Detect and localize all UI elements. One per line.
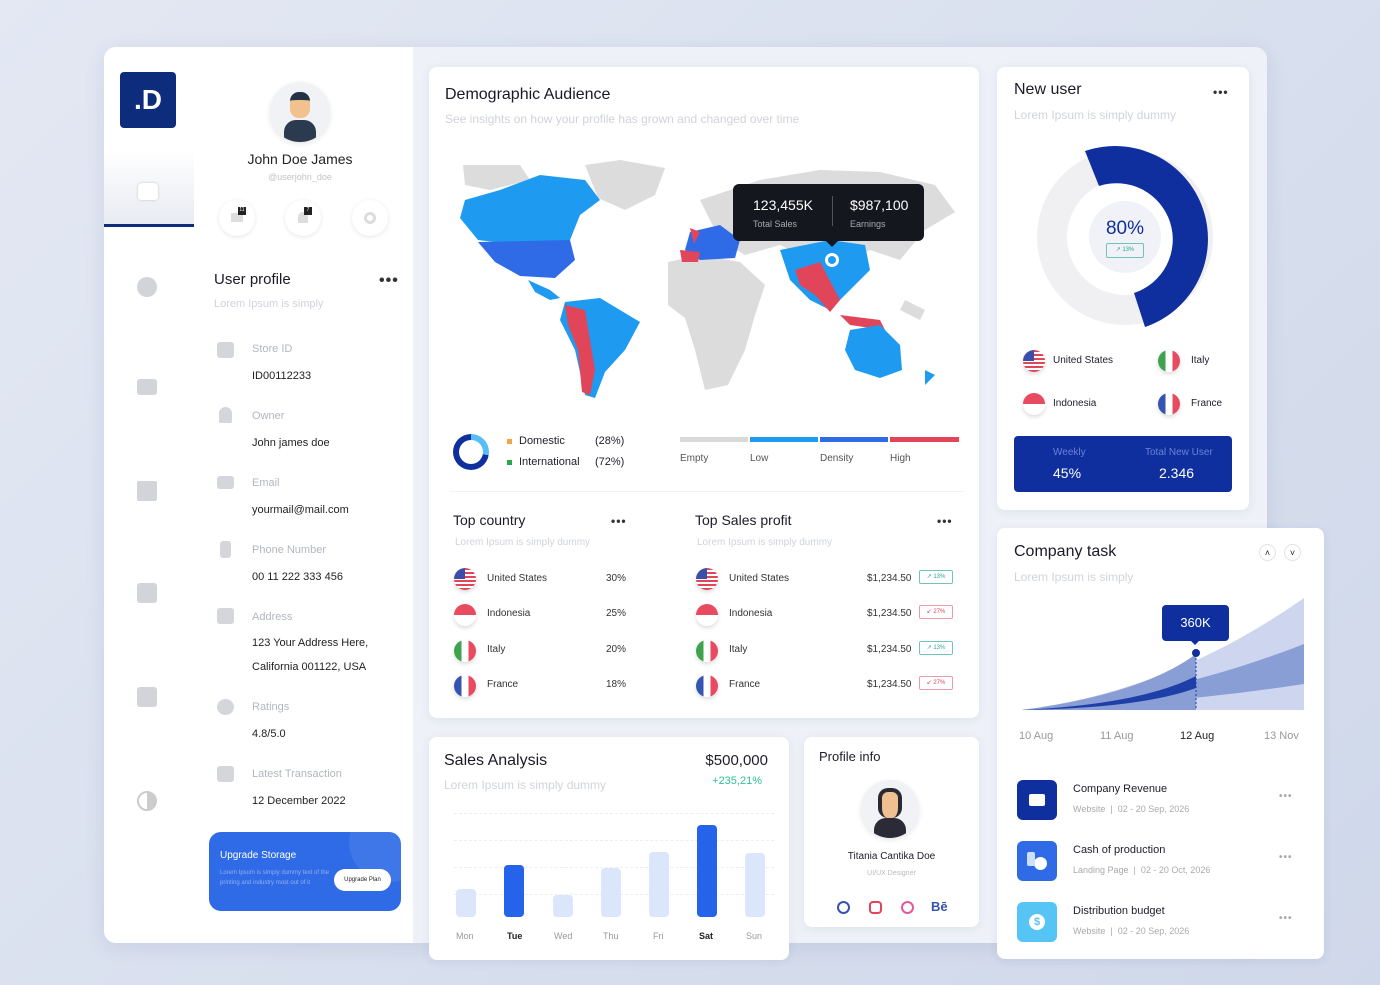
map tooltip: Earnings (850, 219, 886, 229)
profile details list (217, 342, 368, 807)
top country: ••• (611, 514, 627, 528)
panel: new user (997, 67, 1249, 510)
x axis labels: 12 Aug (1180, 730, 1214, 742)
map tooltip: Total Sales (753, 219, 797, 229)
bar chart: Wed (554, 931, 572, 941)
stats box (1014, 436, 1232, 492)
nav arrows: ˄ (1265, 548, 1270, 558)
bar chart: Sun (746, 931, 762, 941)
main container (104, 47, 1267, 943)
user profile heading: User profile (214, 271, 291, 288)
profile details list: ID00112233 (252, 370, 311, 382)
profile details list: Latest Transaction (252, 768, 342, 780)
top country: United States (487, 573, 547, 584)
profile panel: ••• (379, 272, 399, 289)
top country: France (487, 679, 518, 690)
profile details list: 00 11 222 333 456 (252, 571, 343, 583)
top country: 30% (606, 573, 626, 584)
top sales profit: France (729, 679, 760, 690)
bar chart: Mon (456, 931, 474, 941)
top sales profit: ↙ 27% (927, 609, 945, 615)
legend: Domestic (519, 435, 565, 447)
legend: International (519, 456, 580, 468)
colored regions (460, 175, 600, 245)
panel: sales analysis: Sales Analysis (444, 752, 547, 769)
top sales profit: Indonesia (729, 608, 772, 619)
upgrade storage card: Lorem Ipsum is simply dummy text of the printing and industry most out of it (220, 870, 329, 886)
nav arrows: ˅ (1290, 548, 1295, 558)
profile details list: California 001122, USA (252, 661, 366, 673)
panel: sales analysis (429, 737, 789, 960)
bar chart (454, 813, 774, 941)
density scale: Low (750, 453, 768, 464)
social icons: Bē (931, 899, 948, 914)
top country: Top country (453, 512, 525, 528)
profile details list: 123 Your Address Here, (252, 637, 368, 649)
panel: new user: ••• (1213, 85, 1229, 99)
country legend: France (1191, 398, 1222, 409)
top sales profit: $1,234.50 (867, 679, 912, 690)
active home tab (104, 150, 194, 227)
panel: profile info: UI/UX Designer (867, 870, 916, 877)
chart tooltip (1162, 605, 1229, 641)
panel: new user: 80% (1106, 218, 1144, 239)
country legend: Italy (1191, 355, 1209, 366)
upgrade storage card: Upgrade Storage (220, 850, 296, 861)
profile panel: @userjohn_doe (268, 172, 332, 182)
density scale (680, 437, 959, 464)
task: distribution budget: ••• (1279, 913, 1293, 924)
x axis labels: 13 Nov (1264, 730, 1299, 742)
density scale: High (890, 453, 911, 464)
logo (120, 72, 176, 128)
top country: Lorem Ipsum is simply dummy (455, 537, 590, 548)
profile details list: Phone Number (252, 544, 326, 556)
top country: Indonesia (487, 608, 530, 619)
panel: sales analysis: $500,000 (705, 752, 768, 769)
top sales profit: $1,234.50 (867, 573, 912, 584)
profile details list: Owner (252, 410, 284, 422)
task: distribution budget: Website | 02 - 20 Sep, 2026 (1073, 926, 1189, 936)
legend (507, 435, 624, 468)
panel: profile info (804, 737, 979, 927)
top sales profit: United States (729, 573, 789, 584)
profile details list: yourmail@mail.com (252, 504, 349, 516)
panel: new user: Lorem Ipsum is simply dummy (1014, 108, 1176, 122)
profile details list: Email (252, 477, 280, 489)
icon sidebar (104, 47, 195, 943)
country legend: United States (1053, 355, 1113, 366)
task: distribution budget (1017, 902, 1293, 942)
sidebar icons (137, 277, 157, 811)
top country: Italy (487, 644, 505, 655)
panel: new user: New user (1014, 81, 1082, 98)
panel: profile info: Titania Cantika Doe (848, 851, 935, 862)
task: distribution budget: Distribution budget (1073, 905, 1165, 917)
top country: 25% (606, 608, 626, 619)
top sales profit: ↗ 13% (927, 645, 945, 651)
map tooltip: $987,100 (850, 197, 908, 213)
map tooltip (733, 184, 924, 241)
panel: new user: ↗ 13% (1116, 247, 1134, 253)
panel: company task: Company task (1014, 543, 1116, 560)
density scale: Density (820, 453, 853, 464)
top sales profit: Top Sales profit (695, 512, 792, 528)
task: distribution budget: $ (1034, 916, 1040, 928)
task: cash of production (1017, 841, 1293, 881)
top sales profit: $1,234.50 (867, 608, 912, 619)
area chart (1022, 598, 1304, 710)
name: John Doe James (247, 151, 353, 167)
top sales profit: Italy (729, 644, 747, 655)
stats box: Weekly (1053, 447, 1086, 458)
social icons (837, 899, 948, 914)
x axis labels (1019, 730, 1299, 742)
profile details list: 4.8/5.0 (252, 728, 286, 740)
task: company revenue (1017, 780, 1293, 820)
panel: demographic audience: See insights on how your profile has grown and changed over time (445, 112, 799, 126)
x axis labels: 10 Aug (1019, 730, 1053, 742)
panel: demographic audience (429, 67, 979, 718)
profile details list: Address (252, 611, 292, 623)
task: company revenue: Website | 02 - 20 Sep, 2026 (1073, 804, 1189, 814)
action buttons (218, 207, 389, 238)
top sales profit: ••• (937, 514, 953, 528)
task: cash of production: ••• (1279, 852, 1293, 863)
stats box: Total New User (1145, 447, 1213, 458)
x axis labels: 11 Aug (1100, 730, 1133, 742)
action buttons: 11 (239, 207, 245, 213)
profile details list: John james doe (252, 437, 330, 449)
chart tooltip: 360K (1180, 615, 1211, 630)
profile panel (195, 47, 413, 943)
top country: 20% (606, 644, 626, 655)
avatar (270, 82, 330, 142)
density scale: Empty (680, 453, 708, 464)
upgrade storage card: Upgrade Plan (344, 877, 381, 883)
task: cash of production: Landing Page | 02 - 20 Oct, 2026 (1073, 865, 1210, 875)
stats box: 45% (1053, 465, 1081, 481)
profile details list: Store ID (252, 343, 292, 355)
panel: sales analysis: +235,21% (712, 775, 762, 787)
top country (452, 512, 627, 700)
bar chart: Tue (507, 931, 522, 941)
bar chart: Thu (603, 931, 619, 941)
top sales profit: $1,234.50 (867, 644, 912, 655)
bar chart: Fri (653, 931, 664, 941)
country legend (1022, 350, 1222, 418)
panel: profile info: Profile info (819, 749, 880, 764)
avatar (861, 780, 919, 838)
donut chart (1037, 146, 1213, 327)
profile panel: Lorem Ipsum is simply (214, 298, 323, 310)
top country: 18% (606, 679, 626, 690)
top sales profit: ↙ 27% (927, 680, 945, 686)
country legend: Indonesia (1053, 398, 1096, 409)
world map (460, 160, 955, 398)
heading: Demographic Audience (445, 86, 610, 103)
top sales profit (694, 512, 953, 700)
nav arrows (1259, 544, 1301, 561)
panel: sales analysis: Lorem Ipsum is simply dummy (444, 778, 606, 792)
panel: company task: Lorem Ipsum is simply (1014, 570, 1133, 584)
upgrade storage card (209, 832, 401, 911)
panel: company task (997, 528, 1324, 959)
action buttons: 7 (307, 207, 309, 213)
logo: .D (134, 84, 162, 115)
bar chart: Sat (699, 931, 713, 941)
stats box: 2.346 (1159, 465, 1194, 481)
task: company revenue: Company Revenue (1073, 783, 1167, 795)
legend: (28%) (595, 435, 624, 447)
profile details list: Ratings (252, 701, 289, 713)
task: cash of production: Cash of production (1073, 844, 1165, 856)
top sales profit: ↗ 13% (927, 574, 945, 580)
map tooltip: 123,455K (753, 197, 813, 213)
small donut (453, 434, 489, 470)
top sales profit: Lorem Ipsum is simply dummy (697, 537, 832, 548)
task: company revenue: ••• (1279, 791, 1293, 802)
profile details list: 12 December 2022 (252, 795, 346, 807)
legend: (72%) (595, 456, 624, 468)
